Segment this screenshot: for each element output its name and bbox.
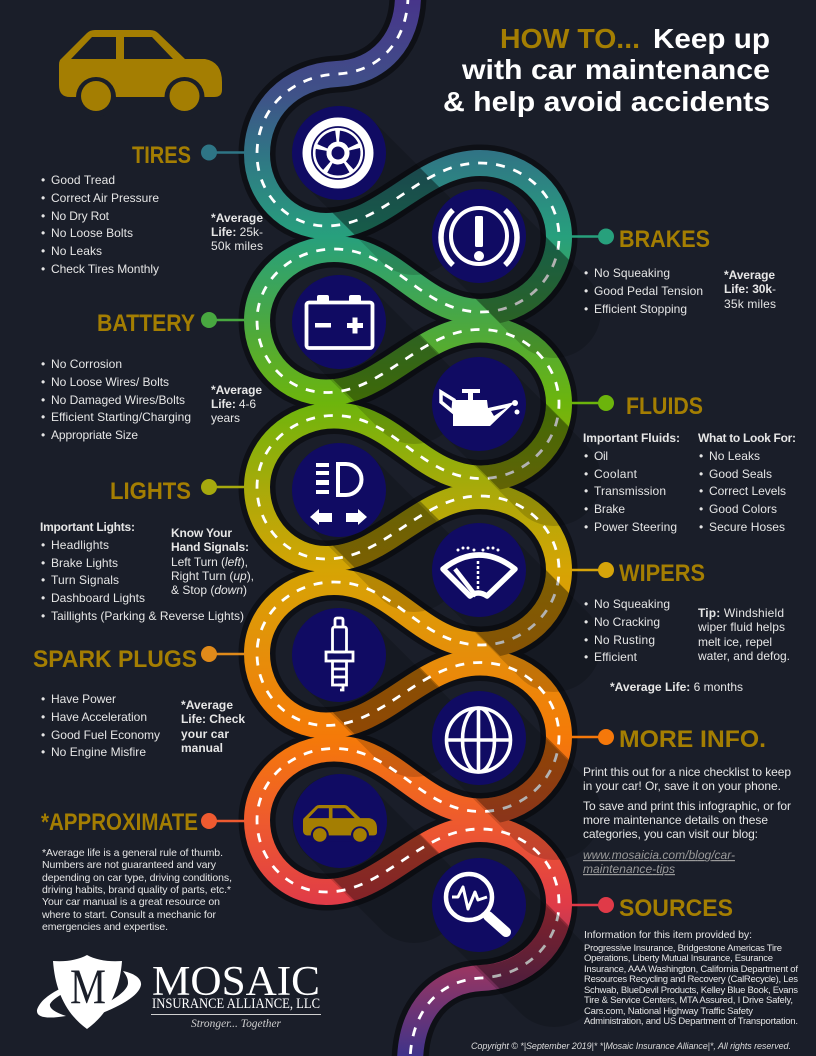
battery connector [201,312,246,328]
icon: magnifying glass with pulse [432,858,526,952]
spark plugs checklist: • [41,692,45,706]
battery checklist: No Loose Wires/ Bolts [51,375,169,389]
battery checklist: No Damaged Wires/Bolts [51,393,185,407]
sources list: Cars.com, National Highway Traffic Safety [584,1006,753,1017]
disclaimer paragraph: depending on car type, driving conditions, [42,872,232,884]
important lights list: • [41,591,45,605]
sources list: Progressive Insurance, Bridgestone Americas Tire [584,943,782,954]
sources list: Administration, and US Department of Transportation. [584,1016,798,1027]
wiper fluid tip: melt ice, repel [698,635,772,649]
spark plugs checklist: Have Power [51,692,116,706]
battery average life: *Average [211,383,262,397]
spark plugs checklist: Have Acceleration [51,710,147,724]
disclaimer paragraph: driving habits, brand quality of parts, etc.* [42,884,231,896]
disclaimer paragraph: *Average life is a general rule of thumb. [42,847,223,859]
important lights list [40,520,244,623]
spark plugs average life: Life: Check [181,712,245,726]
sources list: Insurance, AAA Washington, California Department of [584,964,798,975]
disclaimer paragraph: emergencies and expertise. [42,921,168,933]
spark plugs average life: manual [181,741,223,755]
battery average life: years [211,411,240,425]
tires checklist: • [41,173,45,187]
logo shield and swoosh: M [70,958,106,1014]
brakes average life: *Average [724,268,775,282]
what to look for list: What to Look For: [698,431,796,445]
what to look for list: Secure Hoses [709,520,785,534]
what to look for list: Good Seals [709,467,772,481]
hand signals note: Left Turn (left), [171,555,248,569]
approximate connector [201,813,246,829]
tires average life: 50k miles [211,239,263,253]
important fluids list: Transmission [594,484,666,498]
brakes checklist: • [584,302,588,316]
panel: fluids [570,393,796,534]
icon: battery [292,275,386,369]
heading: tires: TIRES [132,142,191,169]
what to look for list: • [699,502,703,516]
wipers checklist: No Cracking [594,615,660,629]
more info text [583,765,791,841]
important lights list: • [41,573,45,587]
battery checklist: • [41,428,45,442]
blog link: maintenance-tips [583,862,675,876]
tires checklist: Good Tread [51,173,115,187]
icon: spark plug [292,608,386,702]
wiper fluid tip: water, and defog. [697,649,790,663]
tires checklist: No Loose Bolts [51,226,133,240]
winding road [257,0,559,1056]
wipers checklist: • [584,650,588,664]
sources connector [570,897,614,913]
hand signals note: & Stop (down) [171,583,247,597]
battery checklist: • [41,410,45,424]
what to look for list: • [699,467,703,481]
important lights list: Important Lights: [40,520,135,534]
important fluids list: Power Steering [594,520,677,534]
spark plugs average life: *Average [181,698,233,712]
more info text: Print this out for a nice checklist to keep [583,765,791,779]
wipers connector [570,562,614,578]
tires checklist: • [41,209,45,223]
spark plugs average life [181,698,245,755]
brakes checklist [584,266,703,316]
brakes average life [724,268,776,311]
icon: globe [432,691,526,785]
wipers checklist [584,597,670,664]
heading: wipers: WIPERS [619,560,705,587]
spark plugs connector [201,646,246,662]
sources list: Operations, Liberty Mutual Insurance, Esurance [584,953,773,964]
heading: spark plugs: SPARK PLUGS [33,646,197,673]
hand signals note: Know Your [171,526,232,540]
important lights list: • [41,538,45,552]
heading: battery: BATTERY [97,310,195,337]
important lights list: Brake Lights [51,556,118,570]
important fluids list: Coolant [594,467,638,481]
what to look for list: • [699,484,703,498]
logo: Mosaic Insurance Alliance [37,955,321,1030]
what to look for list: Correct Levels [709,484,786,498]
panel: lights [40,478,254,623]
important fluids list: Important Fluids: [583,431,680,445]
icon: oil can [432,357,526,451]
more info connector [570,729,614,745]
brakes average life: Life: 30k- [724,282,776,296]
hand signals note: Hand Signals: [171,540,249,554]
more info text: in your car! Or, save it on your phone. [583,779,781,793]
tires checklist: Check Tires Monthly [51,262,159,276]
important fluids list [583,431,680,534]
battery average life: Life: 4-6 [211,397,256,411]
sources list: Tire & Service Centers, MTA Assured, I Drive Safely, [584,995,793,1006]
hand signals note [171,526,254,597]
sources list: Resources Recycling and Recovery (CalRecycle), Les [584,974,798,985]
wipers checklist: • [584,615,588,629]
panel: wipers [570,560,790,694]
icon: tire [292,106,386,200]
sources list: Schwab, BlueDevil Products, Kelley Blue Book, Evans [584,985,798,996]
title: Keep up [653,23,770,54]
more info text: more maintenance details on these [583,813,768,827]
heading: sources: SOURCES [619,895,733,922]
battery checklist: Appropriate Size [51,428,138,442]
wipers checklist: • [584,597,588,611]
tires checklist: No Dry Rot [51,209,110,223]
spark plugs checklist: No Engine Misfire [51,745,146,759]
panel: approximate note [41,809,246,933]
heading: more info: MORE INFO. [619,726,766,753]
logo shield and swoosh [37,955,141,1029]
wiper fluid tip: wiper fluid helps [697,620,785,634]
disclaimer paragraph: Numbers are not guaranteed and vary [42,859,217,871]
tires checklist [41,173,159,276]
brakes checklist: Efficient Stopping [594,302,687,316]
more info text: categories, you can visit our blog: [583,827,758,841]
wipers average life: *Average Life: 6 months [610,680,743,694]
title: HOW TO... [500,23,640,54]
important fluids list: • [584,520,588,534]
what to look for list [698,431,796,534]
title: with car maintenance [461,54,770,85]
tires average life: Life: 25k- [211,225,263,239]
important lights list: Dashboard Lights [51,591,145,605]
disclaimer paragraph: where to start. Consult a mechanic for [41,909,216,921]
what to look for list: Good Colors [709,502,777,516]
spark plugs checklist: • [41,710,45,724]
logo wordmark: MOSAIC [152,959,320,1005]
fluids connector [570,395,614,411]
tires checklist: • [41,191,45,205]
more info text: To save and print this infographic, or for [583,799,791,813]
panel: more info [570,726,791,876]
wiper fluid tip: Tip: Windshield [698,606,784,620]
tires checklist: • [41,226,45,240]
what to look for list: • [699,449,703,463]
disclaimer paragraph: Your car manual is a great resource on [42,896,220,908]
road centre dashes [257,0,559,1056]
battery checklist: • [41,393,45,407]
logo wordmark: INSURANCE ALLIANCE, LLC [152,996,320,1012]
spark plugs checklist: • [41,745,45,759]
spark plugs checklist: • [41,728,45,742]
wiper fluid tip [697,606,790,663]
panel: sources [570,895,798,1027]
important fluids list: Oil [594,449,608,463]
battery average life [211,383,262,425]
battery checklist [41,357,191,442]
heading: fluids: FLUIDS [626,393,703,420]
wipers checklist: • [584,633,588,647]
important lights list: Taillights (Parking & Reverse Lights) [51,609,244,623]
tires checklist: No Leaks [51,244,102,258]
logo wordmark: Stronger... Together [191,1016,281,1030]
blog link [583,848,735,876]
brakes checklist: Good Pedal Tension [594,284,703,298]
logo wordmark [151,959,321,1030]
disclaimer paragraph [41,847,232,933]
important lights list: • [41,609,45,623]
panel: battery [41,310,262,442]
brakes connector [570,228,614,244]
important fluids list: • [584,467,588,481]
tires checklist: Correct Air Pressure [51,191,159,205]
panel: brakes [570,226,776,316]
spark plugs checklist [41,692,160,759]
battery checklist: Efficient Starting/Charging [51,410,191,424]
spark plugs average life: your car [181,727,229,741]
title [443,23,770,117]
tires checklist: • [41,262,45,276]
wipers checklist: No Rusting [594,633,655,647]
panel: tires [41,142,263,276]
spark plugs checklist: Good Fuel Economy [51,728,160,742]
brakes checklist: No Squeaking [594,266,670,280]
blog link: www.mosaicia.com/blog/car- [583,848,735,862]
sources list [584,943,798,1027]
wipers checklist: No Squeaking [594,597,670,611]
battery checklist: No Corrosion [51,357,122,371]
important lights list: Headlights [51,538,109,552]
tires connector [201,144,246,160]
icon: headlight and arrows [292,443,386,537]
important lights list: • [41,556,45,570]
icon: small car [293,774,387,868]
what to look for list: No Leaks [709,449,760,463]
important fluids list: • [584,502,588,516]
brakes checklist: • [584,266,588,280]
panel: spark plugs [33,646,246,759]
copyright: Copyright © *|September 2019|* *|Mosaic Insurance Alliance|*, All rights reserved. [471,1041,791,1051]
icon: windshield wiper [432,523,526,617]
lights connector [201,479,246,495]
battery checklist: • [41,357,45,371]
wipers checklist: Efficient [594,650,638,664]
important fluids list: Brake [594,502,625,516]
important fluids list: • [584,484,588,498]
what to look for list: • [699,520,703,534]
tires average life: *Average [211,211,263,225]
icon: brake warning [432,189,526,283]
brakes checklist: • [584,284,588,298]
battery checklist: • [41,375,45,389]
important fluids list: • [584,449,588,463]
tires average life [211,211,263,253]
heading: lights: LIGHTS [110,478,191,505]
shaded road strands on right loops [476,237,569,988]
important lights list: Turn Signals [51,573,119,587]
icon: large car [59,30,222,117]
long shadows cast by icon circles [339,153,554,980]
tires checklist: • [41,244,45,258]
sources intro: Information for this item provided by: [584,929,752,941]
heading: approximate: *APPROXIMATE [41,809,198,836]
heading: brakes: BRAKES [619,226,710,253]
shaded road strands on left loops [332,168,440,900]
title: & help avoid accidents [443,86,770,117]
hand signals note: Right Turn (up), [171,569,254,583]
brakes average life: 35k miles [724,297,776,311]
